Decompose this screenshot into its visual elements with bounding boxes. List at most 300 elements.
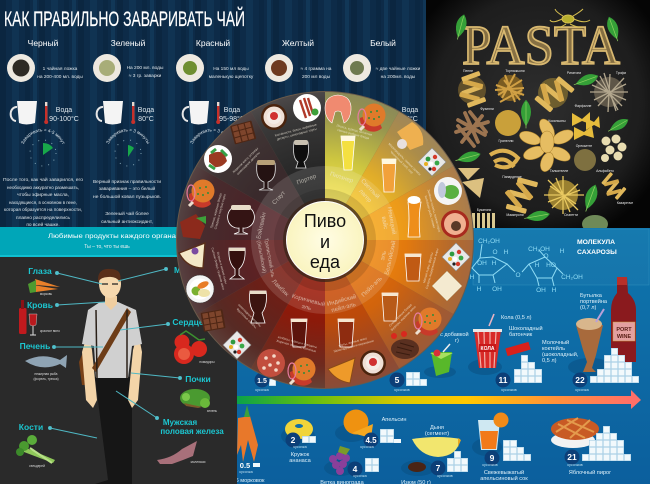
water temperatures [49,107,418,123]
icon: patty [358,104,386,132]
tea amounts: На 150 мл воды [213,66,249,72]
pasta labels: Гранелли [499,139,514,143]
food pairing captions: Мягкие сыры, фрукты [422,251,434,283]
organ labels [19,265,224,436]
organ labels: Кровь [27,300,53,310]
food captions: зелень [207,409,217,413]
molecule diagram: H [504,249,509,256]
tea amounts: ≈ две чайные ложки [376,65,421,72]
green tea note: заваривания – это белый [99,185,156,192]
beer style labels: Бэйлвайн [255,212,268,240]
icon: steak [391,331,419,359]
sugar stack: 4 [365,458,379,472]
food captions [29,292,217,468]
icon: salad [418,148,446,176]
icon: grapes [329,446,350,475]
organ labels: Печень [20,341,50,351]
molecule title: МОЛЕКУЛА [577,239,615,246]
water temperatures: 90-100°C [49,115,79,123]
food captions: нежирная рыба [35,372,58,376]
icon: salad [223,331,251,359]
bottom row labels: кусочков [437,474,453,478]
beer style labels: эль [380,250,388,261]
water temperatures: Вода [56,107,72,114]
pasta labels: Пенне [463,69,473,73]
food pairing captions: Салаты, выдержанные сыры [425,247,440,289]
icon: fish [25,355,67,368]
clock: brewing time: Заваривать ≈ 3 минуты [106,129,150,144]
food pairing captions: шоколадные десерты [236,150,261,176]
bottom row labels: Кружок [291,452,310,458]
tea title: КАК ПРАВИЛЬНО ЗАВАРИВАТЬ ЧАЙ [4,7,245,31]
beer style labels: вайс [380,216,389,230]
column titles: Красный [196,38,230,48]
column titles: Белый [370,38,396,48]
food pairing captions: Копчёная рыба, сливки [424,195,436,229]
beer style labels: эль [301,304,312,312]
tea amounts: на 200-400 мл. воды [37,74,83,80]
icon: celery [16,435,55,463]
icon: patty [414,308,442,336]
icon: meat roll [441,210,469,238]
bottom row labels: Яблочный пирог [569,469,611,476]
beer style labels: Трапистский эль [263,238,276,278]
tea amounts: 200 мл воды [302,74,331,80]
bottom row labels: Свежевыжатый [484,469,524,476]
food pairing captions: Морепродукты, свежие салаты [388,142,422,177]
icon: salmon steak [325,95,351,123]
pasta labels [463,69,633,217]
pasta labels: Фузилли [480,107,494,111]
macaroni [497,170,545,220]
column titles: Черный [28,38,59,48]
clock: brewing time: Заваривать ≈ 3 минуты [190,129,222,144]
shadows [281,358,612,476]
molecule diagram: H [477,286,482,293]
icon: tomatoes [174,331,207,364]
top row labels: Молочный [542,339,569,346]
pasta labels: Альфабето [596,169,614,173]
bottom row labels: Дыня [430,425,444,431]
beer style labels: Стаут [272,190,287,206]
pasta labels: Казаречче [617,201,633,205]
food pairing captions: Копчёности, бекон, кофейные [274,122,317,138]
count badges top row: кусочка [255,388,270,392]
grains [495,110,521,136]
glass: tripel [229,248,245,279]
organ subtitle: Ты – то, что ты ешь [84,244,130,250]
molecule title: САХАРОЗЫ [577,249,617,256]
sugar stack: 9 [503,440,531,461]
black tea note: необходимо аккуратно размешать, [7,185,79,191]
top row labels: Кола (0,5 л) [501,315,532,321]
beer style labels: Немецкий [386,206,397,235]
food captions: красное вино [40,329,60,333]
molecule diagram: H [492,260,497,267]
column titles: Желтый [282,38,314,48]
clock: brewing time [21,129,222,166]
beer style labels: Ламбик [270,279,289,298]
water temperatures: 80°C [402,115,418,123]
molecule diagram: H [560,248,565,255]
food pairing captions: шоколадные десерты [237,303,263,328]
icon: yogurt [430,344,453,376]
top row labels: батончик [509,332,533,338]
food pairing captions: торты, жирные мясо [338,336,368,348]
organ labels: Почки [185,374,211,384]
beer style labels: Светлый [359,178,381,200]
count numbers: 4.5 [365,436,377,445]
pasta labels: Трофи [616,71,626,75]
bottom row labels: 6 морковок [236,478,265,484]
molecule diagram: OH [536,287,546,294]
icon: pineapple ring [285,419,313,439]
organ title: Любимые продукты каждого органа [48,232,176,240]
molecule diagram [470,238,583,294]
penne [458,71,486,108]
food captions: помидоры [199,360,215,364]
food captions: моллюски [191,460,206,464]
panel: favourite foods of organs [0,227,237,484]
sugar stack: 1.5 [269,379,276,386]
icon: plate [434,177,462,205]
food pairing captions: Сладкие и голубые сыры [213,193,227,230]
food pairing captions: Лосось, курица, копченая [336,123,373,137]
top row labels: коктейль [542,345,565,352]
molecule diagram: OH [492,286,502,293]
icon: pizza slice [328,358,355,383]
icon: chocolate [201,309,226,332]
beer style labels: Бельгийский [383,240,398,275]
icon: cups and thermometers [11,101,220,124]
green tea note [93,178,161,225]
icon: chocolate [230,120,256,145]
sugar stack: 0.5 [253,463,260,467]
food pairing captions: свиные рыбные блюда [337,128,370,140]
food pairing captions: Жареная свинина, копчёные [276,339,317,353]
food pairing captions: Острые и мягкие сыры [216,251,228,285]
beer style labels: Коричневый [291,293,326,308]
count numbers: 21 [567,452,577,462]
icon: chocolate bar [505,342,531,356]
sugar stack: 11 [514,355,542,383]
bottom row labels: Апельсин [382,417,406,423]
food pairing captions: Сытные блюда, тушёное мясо [210,247,226,291]
icon: greens [180,389,210,408]
glass: lambic [250,291,266,323]
molecule diagram: OH [477,260,487,267]
molecule diagram: CH₂OH [478,238,500,245]
molecule diagram: CH₂OH [561,274,583,281]
bottom row labels: кусочка [353,474,368,478]
icon: carrots [28,279,60,293]
clock: brewing time: Заваривать ≈ 4-5 минут [21,129,65,144]
panel: tea brewing background [0,0,430,230]
spaghetti nest [544,176,584,214]
glass: porter [294,140,308,168]
molecule diagram: HO [546,262,556,269]
food pairing captions: Чесночный хлеб, сыр [389,150,414,175]
count badges top row: кусочков [501,388,517,392]
top row labels: с добавкой [440,331,469,338]
tea amounts: маленькую щепотку [209,75,254,80]
food pairing captions: Пряные, жареные блюда [209,193,223,229]
alfabeto [574,149,596,171]
icon: cupcake [360,350,386,376]
green tea note: не большой ковал пузырьков. [93,193,161,200]
count numbers: 0.5 [240,461,250,470]
icon: wine [19,300,37,335]
black tea note: которая образуется на поверхности, [4,207,82,213]
glass: light lager [382,159,396,192]
sugar stack: 21 [582,426,631,461]
center label: Пиво [304,211,346,231]
molecule diagram: O [492,249,498,256]
icon: port wine bottle: WINE [617,334,632,340]
icon: patty [187,180,214,208]
count numbers: 2 [291,435,296,445]
black tea note: После того, как чай заварился, его [3,176,83,183]
gradient arrow [237,390,641,409]
icon: port wine bottle [611,277,636,362]
glass: ipa [338,319,354,347]
icon: port wine bottle: PORT [616,327,632,333]
beer style labels: Пейл-эль [360,275,384,299]
water temperatures: Вода [224,107,240,114]
water temperatures: 95-98°C [219,115,245,123]
pasta labels: Тортиккьони [505,69,525,73]
pasta labels: Тальятелле [550,169,568,173]
fusilli [456,112,488,146]
top row labels: г) [455,338,459,344]
black tea note: находящиеся, в основном в пене, [9,201,77,206]
count badges top row: 22 [575,375,585,385]
center label: еда [310,252,341,272]
icon: raisins [408,462,426,472]
glass: pale ale [382,293,398,321]
bottom row labels: (сегмент) [425,431,449,437]
black tea note [3,176,83,228]
organ connector lines [48,268,182,438]
bottom row labels: кусочка [293,445,308,449]
bottom row labels: кусочков [482,463,498,467]
icon: tea plates [7,54,371,82]
molecule diagram: H [470,274,475,281]
pasta labels: Фарфалле [575,104,592,108]
beer style labels [255,172,398,314]
food captions: сельдерей [29,464,45,468]
food pairing captions: десерты, шоколадные торты [276,127,318,141]
food pairing captions: Зелёные салаты, мягкие сыры [426,189,442,233]
icon: carrots [237,405,258,462]
center label [304,211,346,272]
pasta labels: Орекьетте [576,144,592,148]
trofie [590,73,628,112]
glass: belgian [405,254,421,281]
count numbers: 7 [436,463,441,473]
icon: cola cup: КОЛА [481,346,495,352]
food pairing captions: Стейк, пряные блюда [388,303,413,328]
green tea note: Верный признак правильности [93,178,161,185]
count badges top row: кусочка [575,388,590,392]
bottom row labels [236,417,611,484]
organ labels: Мозг [174,265,194,275]
pasta labels: Маккерони [506,213,524,217]
icon: cake slice [179,243,205,268]
count numbers: 4 [353,464,358,474]
organ labels: Глаза [28,266,52,276]
center circle [283,198,367,282]
icon: flying spaghetti monster [550,9,590,28]
tagliatelle [495,74,524,102]
bottom row labels: кусочка [360,445,375,449]
casarecce [597,169,629,203]
bottom row labels: кусочка [239,470,254,474]
column titles: Зеленый [111,38,146,48]
count badges top row: 11 [498,375,508,385]
icon: patty [288,358,316,386]
panel: tea brewing [3,6,421,228]
beer style labels: лагер [357,189,373,205]
molecule diagram: O [515,272,521,279]
count badges top row: кусочков [394,388,410,392]
beer style labels: (бельгийский) [255,240,268,274]
molecule title [577,239,617,256]
bottom row labels: кусочков [567,463,583,467]
top row labels: (0,7 л) [580,305,596,311]
pasta title: PASTA [462,15,621,77]
icon: plate [186,275,214,303]
black tea note: плавно распределились [16,216,70,221]
top row labels: (шоколадный, [542,351,579,358]
bottom row labels: апельсиновый сок [480,475,528,482]
pappardelle [490,151,518,167]
conchiglie [518,116,576,173]
pasta labels: Папарделле [502,175,522,179]
icon: juice glass [478,412,508,450]
farfalle [572,112,600,140]
top row labels: Бутылка [580,293,603,299]
icon: cupcake [261,104,287,130]
tea amounts: На 200 мл. воды [127,65,164,71]
icon: bread and garlic [397,122,423,150]
beer style labels: пейл-эль [331,301,357,314]
green tea note: Зеленый чай более [105,210,149,217]
count numbers [240,435,577,474]
beer style labels: Пилзнер [329,172,354,185]
count badges top row: 1.5 [257,378,267,385]
glass: stout [257,160,275,190]
wheel sectors [176,91,474,389]
sugar stack: 7 [447,451,468,472]
top row labels: портвейна [580,298,608,305]
tea amounts: ≈ 3 гр. заварки [129,73,162,79]
panel: pasta [426,0,650,233]
water temperatures: Вода [138,107,154,114]
organ labels: Сердце [172,317,204,327]
pasta labels: Кокильоны [548,119,566,123]
organ labels: Кости [19,422,43,432]
icon: basil leaves [453,13,631,223]
organ labels: Мужская [163,418,198,427]
figure: man [79,269,142,484]
food pairing captions: колбасы, курица и говядина [277,335,317,349]
top row labels [440,293,608,364]
count numbers: 9 [490,453,495,463]
tea amounts: на 200мл. воды [381,74,416,80]
icon: milkshake [576,309,604,372]
column titles [28,38,396,48]
conchiglie rigate [458,168,484,218]
food pairing captions [209,122,442,353]
count badges bottom row [286,432,580,476]
black tea note: чтобы эфирные масла, [17,192,69,198]
black tea note: по всей чашке. [26,221,60,228]
beer wheel [176,91,474,389]
glass: pilsner [341,136,355,170]
green tagliatelle [582,215,608,233]
molecule diagram: O [543,253,549,260]
rigatoni [529,70,579,116]
top row labels: Шоколадный [509,325,543,332]
pasta labels: Ригатони [567,71,581,75]
icon: apple pie [551,418,599,448]
molecule diagram: H [535,262,540,269]
icon: squid [157,441,197,464]
food captions: (форель, треска) [33,377,59,381]
molecule diagram: CH₂OH [528,246,550,253]
tea amounts [37,65,421,80]
tea amounts: 1 чайная ложка [43,65,78,72]
icon: bacon plate [293,94,321,122]
glass: brown ale [291,319,307,347]
beer style labels: Индийский [326,293,357,308]
organ labels: половая железа [160,427,224,436]
bottom row labels: ананаса [289,458,312,464]
pasta labels: Спагетти [564,213,578,217]
icon: salad [442,243,470,271]
top row labels: 0,5 л) [542,358,557,364]
sugar stack: 5 [406,372,427,386]
food captions: морковь [40,292,52,296]
panel: blue sugar chart [236,228,650,484]
food pairing captions: Шоколадные или морковные [333,339,375,353]
icon: salami [257,349,285,377]
glass: wheat [408,196,421,237]
sugar stack: 4.5 [380,429,401,443]
icon: cheese [432,271,462,301]
food pairing captions: Фруктовые салаты, [235,307,258,330]
icon: melon slice [412,437,461,457]
icon: orange [344,410,373,438]
pasta labels: Букатини [477,208,491,212]
food pairing captions: Жареное мясо, устрицы [232,146,260,174]
tea amounts: ≈ 4 грамма на [301,66,332,72]
green tea note: сильный антиоксидант, [101,218,153,225]
molecule diagram: H [552,287,557,294]
count badges top row: 5 [395,375,400,385]
food pairing captions: Бургеры, жареное мясо [390,305,417,332]
icon: meat plate [204,145,232,173]
bucatini [472,213,495,230]
water temperatures: 80°C [138,115,154,123]
glass: barleywine [228,205,254,234]
orecchiette [601,134,626,162]
center label: и [320,232,330,252]
water temperatures: Вода [402,107,418,114]
beer style labels: Портер [296,174,318,186]
sugar stack: 2 [302,436,316,443]
